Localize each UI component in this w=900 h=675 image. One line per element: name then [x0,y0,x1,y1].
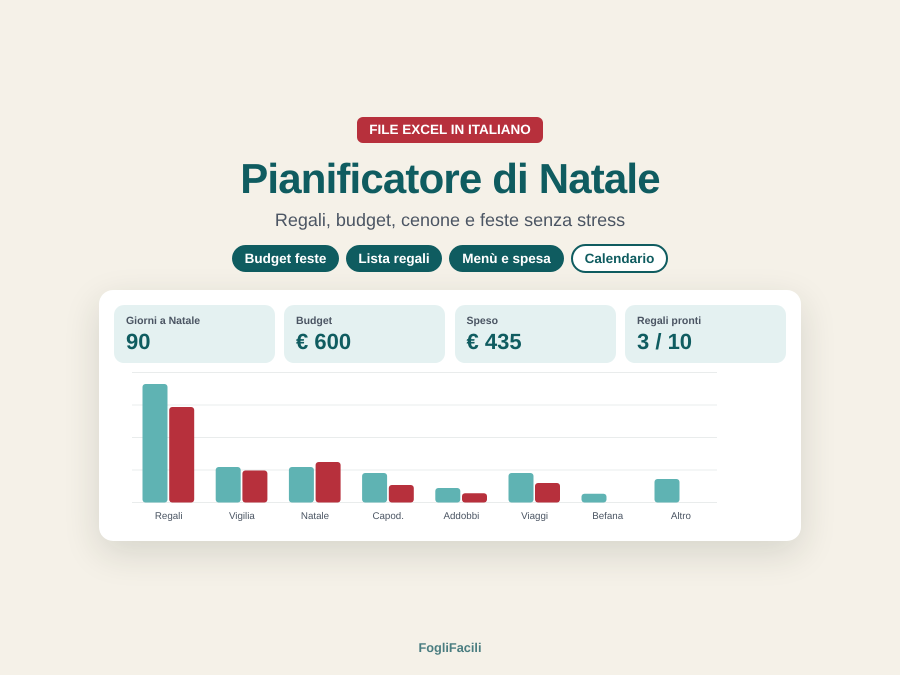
kpi: budget: € 600 [296,329,351,354]
panel: dashboard card [99,290,801,541]
pill: calendario: Calendario [585,251,654,266]
pill: budget feste [232,245,339,272]
title: Pianificatore di Natale [240,154,660,202]
bar chart: Altro [671,511,691,522]
kpi: speso: € 435 [466,329,522,354]
bar chart: Capod. [372,511,404,522]
kpi: regali pronti: Regali pronti [637,314,701,326]
pill: menu e spesa: Menù e spesa [462,251,551,266]
kpi: budget [284,305,445,363]
kpi: budget: Budget [296,314,332,326]
bar chart: Vigilia [229,511,255,522]
kpi: regali pronti [625,305,786,363]
pill: menu e spesa [449,245,564,272]
kpi: speso: Speso [466,314,498,326]
bar chart: Viaggi [521,511,548,522]
subtitle: Regali, budget, cenone e feste senza stress [275,210,625,230]
kpi: giorni a natale: 90 [126,329,150,354]
bar chart: Befana [592,511,624,522]
pill: lista regali [346,245,442,272]
pill: calendario [571,244,668,273]
pill: lista regali: Lista regali [358,251,430,266]
bar chart: Natale [301,511,329,522]
kpi: regali pronti: 3 / 10 [637,329,692,354]
kpi: giorni a natale [114,305,275,363]
bar chart: Addobbi [444,511,479,522]
footer brand: FogliFacili [418,640,482,655]
pill: budget feste: Budget feste [245,251,326,266]
kpi: speso [454,305,616,363]
kpi: giorni a natale: Giorni a Natale [126,314,200,326]
bar chart: Regali [155,511,183,522]
badge: file excel [357,117,543,143]
badge: file excel: FILE EXCEL IN ITALIANO [369,122,531,137]
